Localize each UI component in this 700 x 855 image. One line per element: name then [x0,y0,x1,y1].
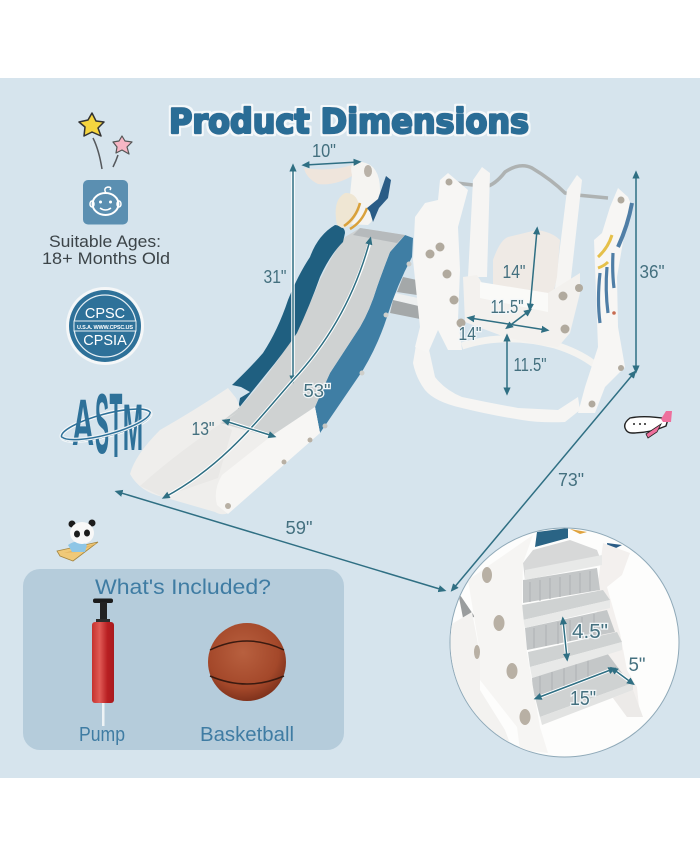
label 73 inch: 73" [558,470,584,490]
slide [130,225,413,514]
arrow: step depth [613,669,632,683]
badge: CPSC CPSIA: CPSC [85,306,125,322]
age text: Suitable Ages: [49,232,161,251]
swing rear ring [462,339,594,364]
rocket hoop [304,162,391,229]
icon: baby face [83,180,128,224]
panel: what's included [23,569,344,750]
label 31 inch: 31" [264,267,286,287]
label 36 inch: 36" [640,262,664,282]
swing left frame [413,173,468,353]
swing top rod [448,166,608,198]
age text line two: 18+ Months Old [42,249,170,268]
label 59 inch: 59" [286,518,312,538]
arrow: seat depth [508,311,529,327]
inset far left panel [450,612,510,742]
arrow: 53 inch [165,240,370,497]
swing seat [463,273,580,347]
arrow: step rise [563,620,567,658]
icon: stars [79,113,132,169]
label 53 inch: 53" [304,381,330,401]
swing seat back [493,230,560,300]
title: Product Dimensions [169,102,529,142]
inset left pillar [468,535,548,753]
badge: CPSC CPSIA: CPSIA [83,333,127,349]
badge: CPSC CPSIA: U.S.A. WWW.CPSC.US [77,325,133,331]
arrow: step width [537,669,613,698]
swing posts [468,167,490,277]
logo: ASTM: A [72,385,94,459]
logo: ASTM: M [123,390,143,465]
ladder behind slide [390,277,427,320]
arrow: 10 inch [305,162,358,165]
inset risers [523,568,600,603]
swing bolts [426,178,624,408]
circle inset: ladder detail [450,528,679,757]
dimension arrows [118,162,636,698]
icon: airplane [625,411,672,438]
inset bolts [474,567,530,725]
inset background slide parts [535,528,568,547]
dimension labels [192,141,664,710]
slide bed [220,228,405,437]
label 13 inch: 13" [192,419,214,439]
badge: CPSC CPSIA [66,287,144,365]
arrow: seat width [470,318,546,330]
swing base [413,345,580,422]
basketball label: Basketball [200,724,294,746]
label step rise: 4.5" [572,621,608,643]
icon: pump [92,598,114,726]
arrow: seat back height [530,230,537,308]
included heading: What's Included? [95,576,271,599]
slide top lip [353,228,405,243]
arrow: 31 inch [291,167,295,380]
swing right frame [578,188,632,413]
arrow: seat ground clearance [506,337,508,392]
arrow: 59 inch [118,492,443,590]
label seat width 14 inch: 14" [458,324,482,344]
slide lower white run [130,388,320,514]
pump label: Pump [79,724,125,746]
panda on paper plane [57,520,98,561]
slide right wall [315,235,413,433]
logo: ASTM: T [110,376,122,478]
arrow: 13 inch [225,421,273,436]
arrow: 36 inch [635,174,637,370]
logo: ASTM: S [95,378,109,472]
icon: basketball [208,623,286,701]
slide left wall [232,225,345,409]
swing set [413,166,632,422]
logo: ASTM [59,376,153,478]
arrow: 73 inch [453,373,634,589]
swing frame decorations [598,235,612,268]
label step depth: 5" [628,655,646,676]
label step width: 15" [570,688,596,710]
inset top platform [523,540,602,580]
label clearance 11.5 inch: 11.5" [514,355,546,375]
inset leg [639,706,643,717]
inset right pillar [597,543,638,704]
label 10 inch: 10" [312,141,336,161]
label seat depth 11.5 inch: 11.5" [490,297,524,317]
inset treads [522,590,610,620]
label seat back 14 inch: 14" [502,262,526,282]
